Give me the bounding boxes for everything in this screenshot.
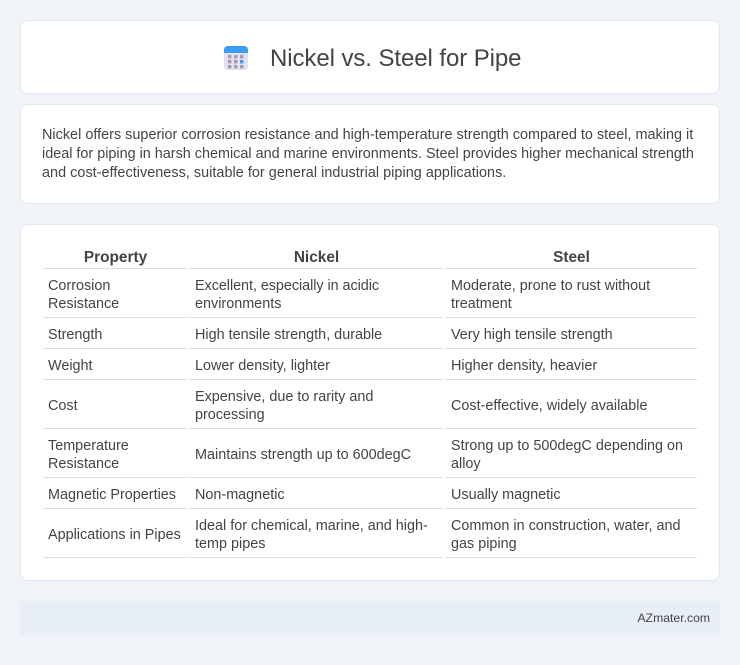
summary card <box>20 104 720 204</box>
comparison table: Usually magnetic <box>451 487 561 503</box>
column heading: Steel: Steel <box>553 249 590 266</box>
comparison table: Cost-effective, widely available <box>451 398 648 414</box>
comparison table: environments <box>195 296 281 312</box>
comparison table: gas piping <box>451 536 517 552</box>
comparison table: processing <box>195 407 265 423</box>
summary text: Nickel offers superior corrosion resistance and high-temperature strength compared to steel, making it <box>42 127 693 143</box>
comparison table: Applications in Pipes <box>48 527 181 543</box>
comparison table: Very high tensile strength <box>451 327 613 343</box>
table card <box>20 224 720 581</box>
column heading: Nickel: Nickel <box>294 249 339 266</box>
comparison table: Higher density, heavier <box>451 358 597 374</box>
comparison table: High tensile strength, durable <box>195 327 382 343</box>
summary text: and cost-effectiveness, suitable for general industrial piping applications. <box>42 165 506 181</box>
header card <box>20 20 720 94</box>
summary text: ideal for piping in harsh chemical and marine environments. Steel provides higher mechanical strength <box>42 146 694 162</box>
comparison table: Resistance <box>48 296 119 312</box>
icon: calendar <box>224 46 248 70</box>
summary text <box>42 127 694 181</box>
comparison table: Excellent, especially in acidic <box>195 278 379 294</box>
column heading: Property: Property <box>84 249 147 266</box>
comparison table: Maintains strength up to 600degC <box>195 447 411 463</box>
footer bar <box>20 601 720 635</box>
title: Nickel vs. Steel for Pipe <box>270 45 521 72</box>
comparison table: Lower density, lighter <box>195 358 330 374</box>
comparison table: Strong up to 500degC depending on <box>451 438 683 454</box>
comparison table: Resistance <box>48 456 119 472</box>
comparison table: Strength <box>48 327 102 343</box>
comparison table: temp pipes <box>195 536 265 552</box>
comparison table: Ideal for chemical, marine, and high- <box>195 518 428 534</box>
comparison table: Corrosion <box>48 278 110 294</box>
footer text: AZmater.com <box>638 611 710 625</box>
comparison table: treatment <box>451 296 512 312</box>
comparison table: Common in construction, water, and <box>451 518 681 534</box>
comparison table: Cost <box>48 398 78 414</box>
comparison table: Weight <box>48 358 93 374</box>
comparison table: Temperature <box>48 438 129 454</box>
comparison table: Non-magnetic <box>195 487 285 503</box>
comparison table: Moderate, prone to rust without <box>451 278 650 294</box>
comparison table: alloy <box>451 456 481 472</box>
comparison table: Magnetic Properties <box>48 487 176 503</box>
comparison table: Expensive, due to rarity and <box>195 389 373 405</box>
